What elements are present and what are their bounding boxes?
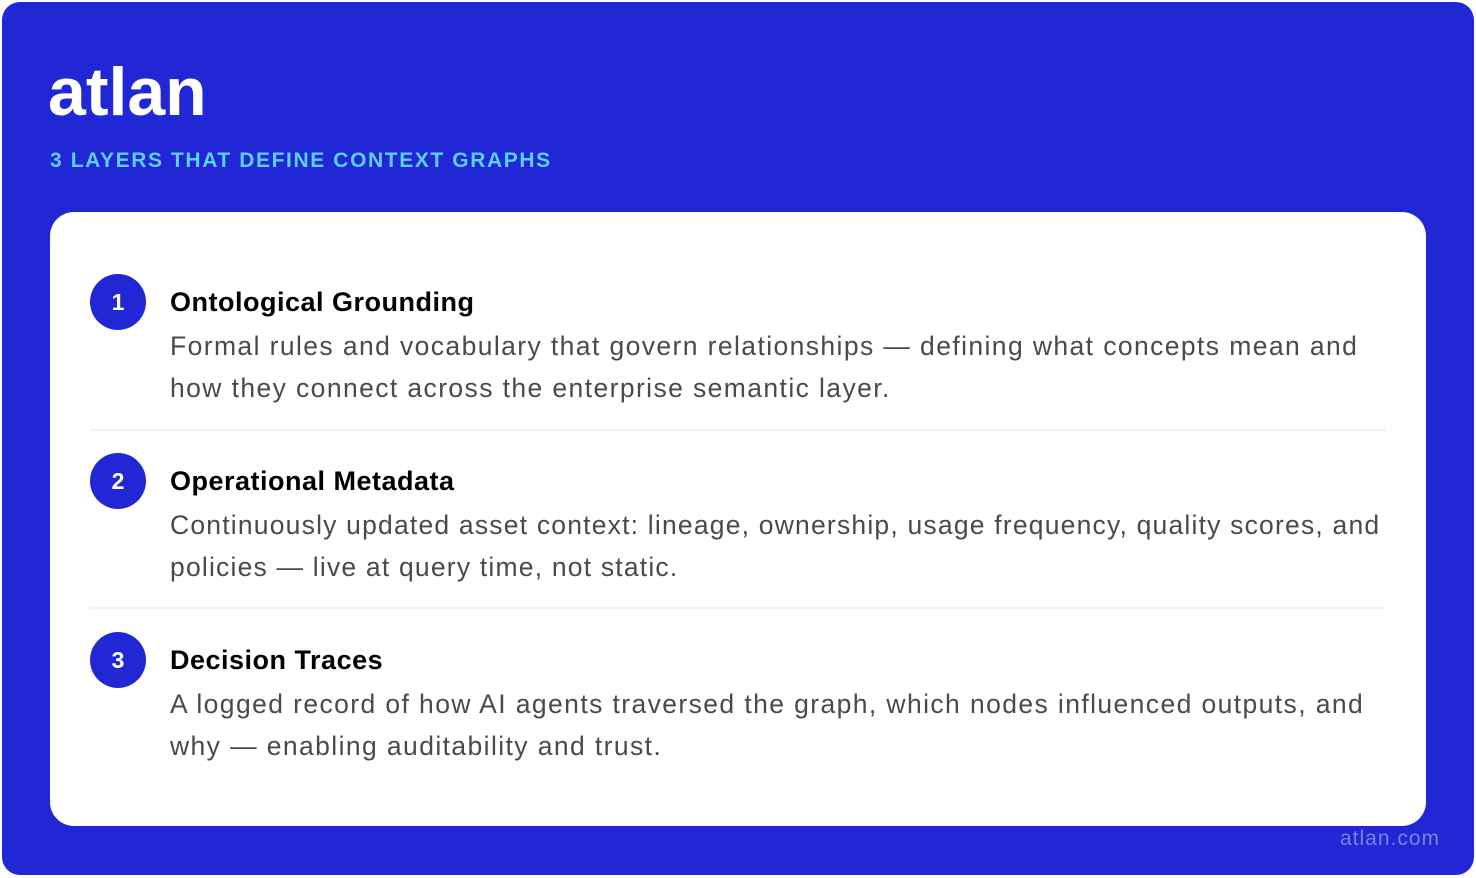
text 3: why — enabling auditability and trust. xyxy=(170,730,662,760)
text 1: how they connect across the enterprise semantic layer. xyxy=(170,372,891,402)
icon: number 1 xyxy=(90,274,146,330)
title: atlan logo: atlan xyxy=(48,54,207,130)
item 3: Decision Traces xyxy=(90,632,1364,760)
icon: number 2: 2 xyxy=(112,468,124,494)
icon: number 3: 3 xyxy=(112,647,124,673)
text 3: A logged record of how AI agents traversed the graph, which nodes influenced outputs, and xyxy=(170,689,1364,719)
icon: number 1: 1 xyxy=(112,289,124,315)
text 3 xyxy=(170,689,1364,760)
text 2 xyxy=(170,510,1380,582)
text 2: Continuously updated asset context: lineage, ownership, usage frequency, quality scores, and xyxy=(170,510,1380,540)
item 1: Ontological Grounding xyxy=(90,274,1358,402)
heading 3: Decision Traces xyxy=(170,645,383,675)
text 1 xyxy=(170,331,1358,402)
footer: atlan.com: atlan.com xyxy=(1340,827,1440,850)
item 2: Operational Metadata xyxy=(90,453,1380,582)
heading 2: Operational Metadata xyxy=(170,466,455,496)
subtitle: 3 LAYERS THAT DEFINE CONTEXT GRAPHS xyxy=(50,149,552,172)
panel: layers card xyxy=(50,212,1426,826)
text 1: Formal rules and vocabulary that govern relationships — defining what concepts mean and xyxy=(170,331,1358,361)
icon: number 2 xyxy=(90,453,146,509)
heading 1: Ontological Grounding xyxy=(170,287,474,317)
icon: number 3 xyxy=(90,632,146,688)
text 2: policies — live at query time, not static. xyxy=(170,552,678,582)
